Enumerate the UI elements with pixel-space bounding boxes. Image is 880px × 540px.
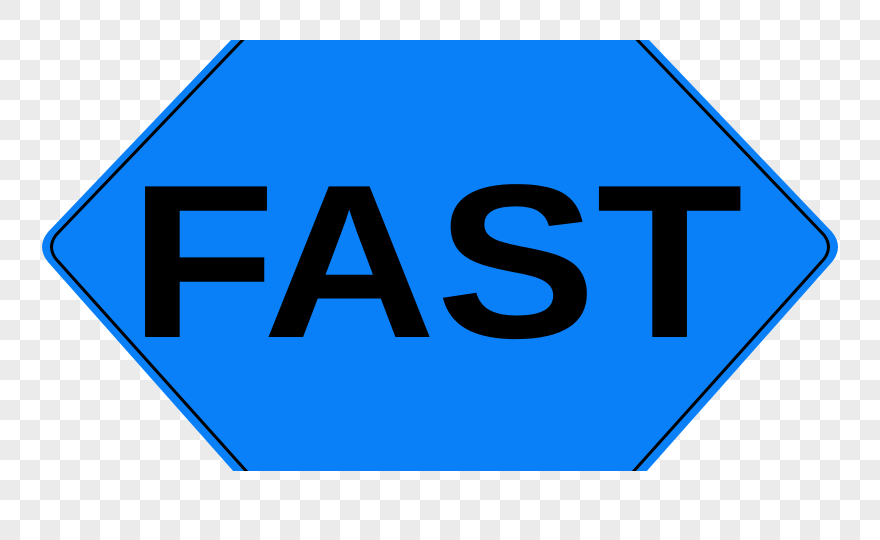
- hexagon sign body: [42, 20, 838, 490]
- text: FAST: FAST: [129, 140, 743, 384]
